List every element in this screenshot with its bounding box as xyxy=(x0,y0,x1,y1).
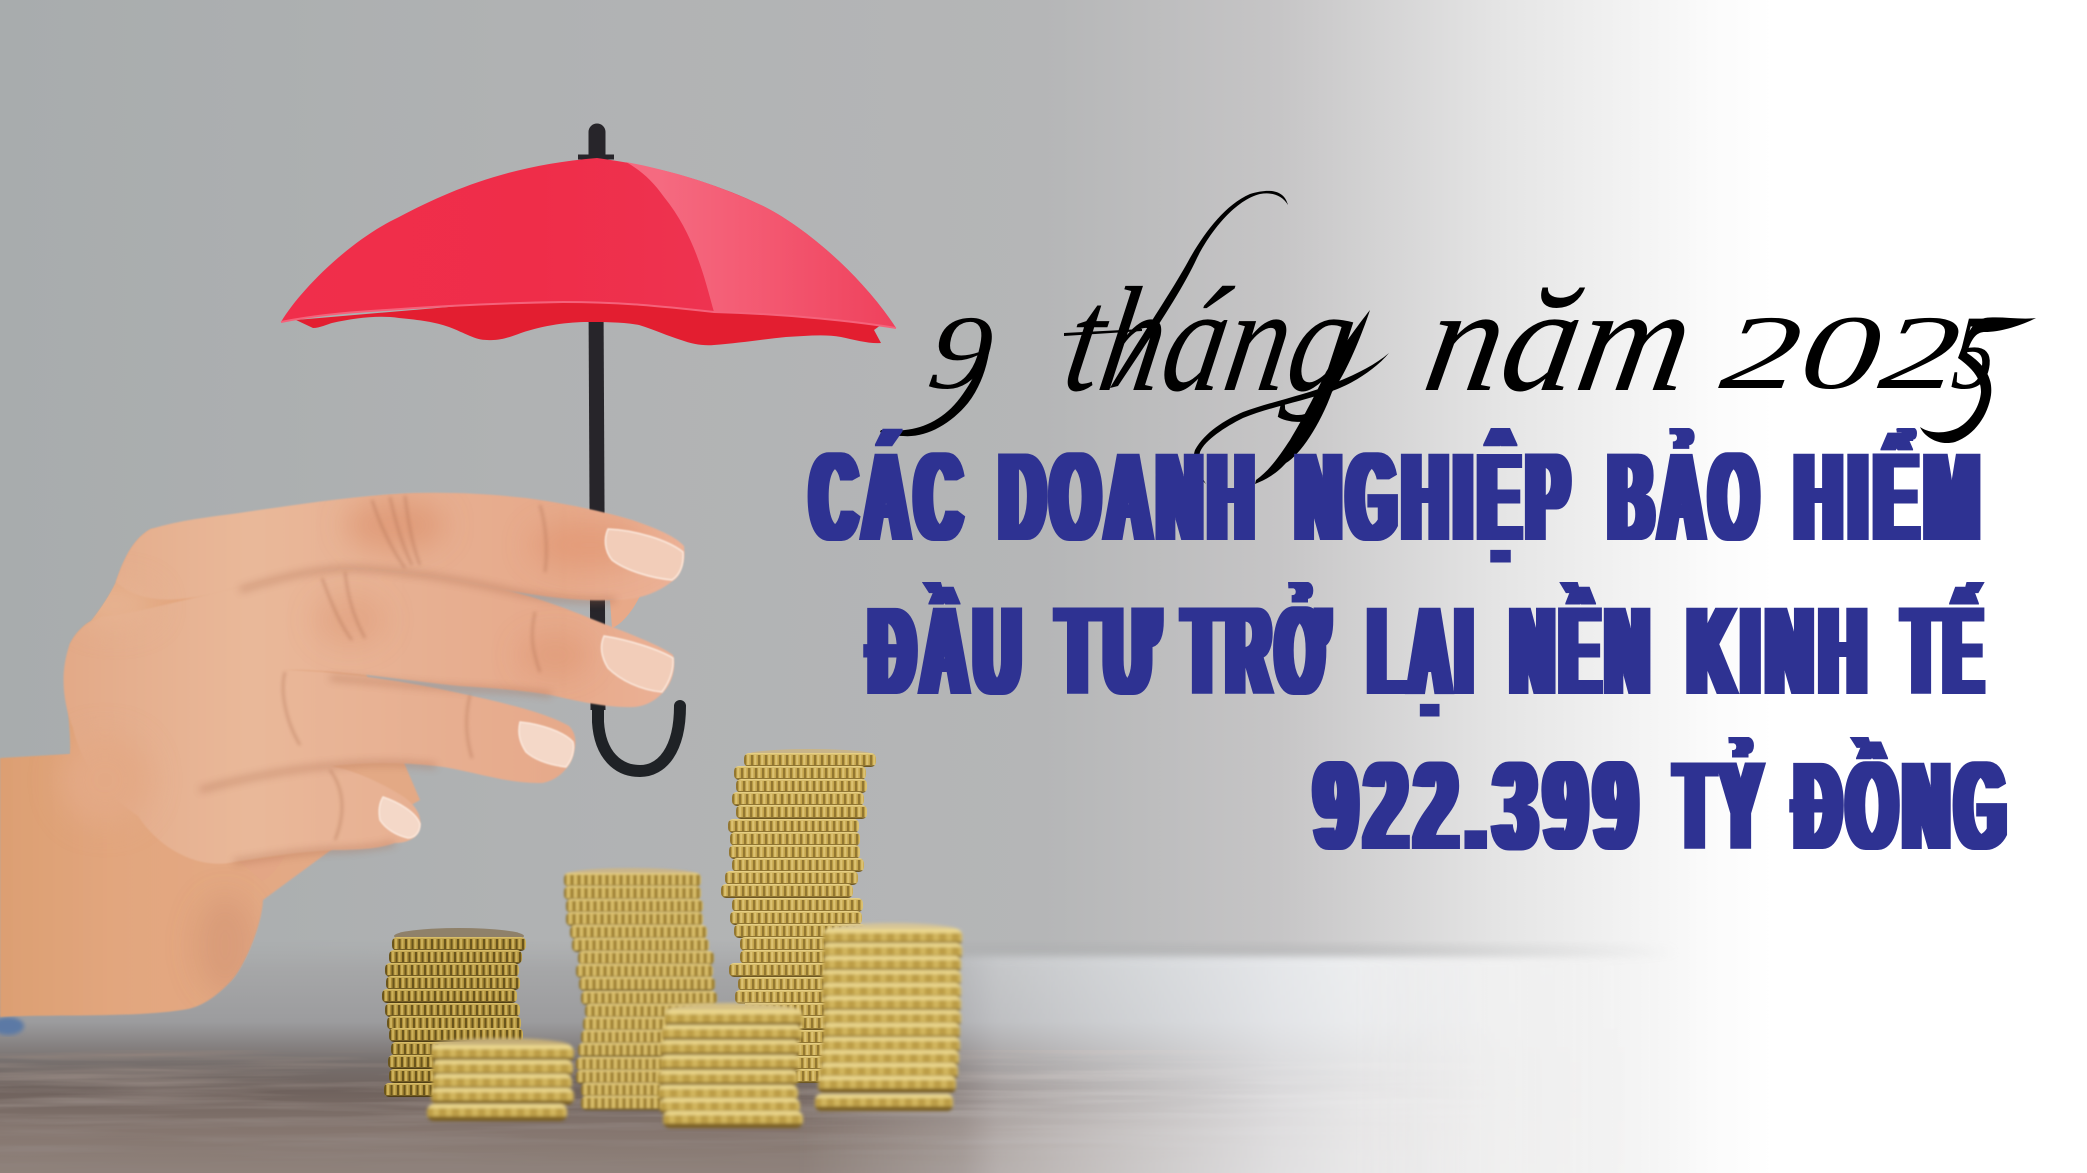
script swashes xyxy=(880,191,2036,484)
headline: TẾ xyxy=(1904,582,1988,721)
coin stack: front centre xyxy=(658,1003,803,1128)
coin stacks xyxy=(382,749,962,1128)
headline line 1: NGHIỆP xyxy=(1296,428,1575,567)
headline xyxy=(811,428,2012,876)
fingers xyxy=(64,493,684,864)
headline line 2: TƯ xyxy=(1058,582,1165,721)
headline line 1: BẢO xyxy=(1609,428,1764,567)
knuckle creases xyxy=(283,496,546,840)
warm tones and palm shading xyxy=(60,499,650,995)
palm and wrist xyxy=(0,520,420,1017)
fingernails xyxy=(379,529,683,838)
hand xyxy=(0,493,684,1017)
headline line 2: LẠI xyxy=(1369,582,1478,721)
umbrella canopy xyxy=(281,158,896,345)
headline line 2: KINH xyxy=(1688,582,1873,721)
script title: 9 tháng năm 2025 xyxy=(880,191,2036,484)
ferrule xyxy=(578,131,614,157)
headline line 2: NỀN xyxy=(1511,582,1655,721)
canopy light panel xyxy=(626,162,896,328)
coin stack: front left xyxy=(427,1038,574,1121)
thumb tip under hand xyxy=(240,856,285,881)
headline line 3: TỶ xyxy=(1676,737,1768,876)
script title: 9 tháng năm 2025: 9 xyxy=(922,294,1000,412)
index finger xyxy=(116,493,684,600)
little finger xyxy=(138,763,420,864)
script title: 9 tháng năm 2025: 202 xyxy=(1716,293,1966,411)
middle finger xyxy=(64,569,674,728)
canopy top xyxy=(281,158,896,328)
headline line 1: CÁC xyxy=(811,428,968,567)
headline line 1 xyxy=(811,428,1986,567)
script title: 9 tháng năm 2025: năm xyxy=(1414,256,1706,423)
fingertip behind pole xyxy=(610,596,640,628)
headline line 3: 922.399 xyxy=(1315,737,1645,876)
shadows between fingers xyxy=(200,568,615,862)
coin stack: left xyxy=(382,928,526,1097)
headline line 2: ĐẦU xyxy=(869,582,1027,721)
coin stack: tall back xyxy=(721,749,876,1083)
headline line 1: DOANH xyxy=(1000,428,1260,567)
canopy underside xyxy=(296,295,885,345)
headline line 2 xyxy=(869,582,1988,721)
umbrella pole and hook xyxy=(578,131,680,771)
ring finger xyxy=(73,670,575,816)
script title: 9 tháng năm 2025: tháng xyxy=(1054,256,1369,423)
coin stack: middle xyxy=(564,868,717,1110)
coin stack: right xyxy=(815,923,962,1111)
script title: 9 tháng năm 2025: 5 xyxy=(1948,293,2002,411)
headline line 2: TRỞ xyxy=(1184,582,1334,721)
